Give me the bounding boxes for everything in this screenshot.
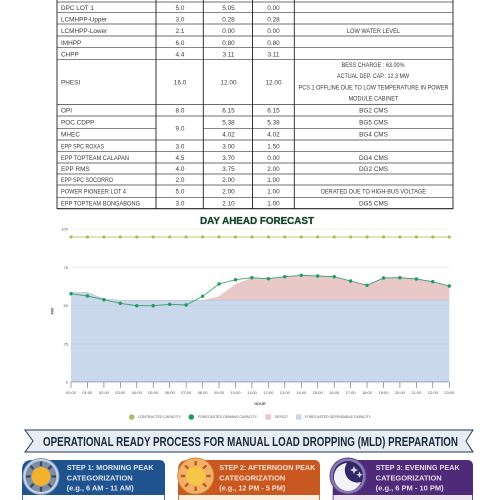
row: LCMHPP-Upper: 0.28 bbox=[222, 16, 235, 24]
card: step 2 afternoon peak: STEP 2: AFTERNOON PEAK bbox=[219, 463, 316, 472]
row: EPP TOPTEAM BONGABONG: DG5 CMS bbox=[359, 200, 388, 208]
chart: day ahead forecast area and line chart bbox=[50, 226, 455, 420]
x axis: 17:00 bbox=[346, 390, 356, 395]
row: EPP SPC SOCORRO: 2.00 bbox=[222, 177, 235, 184]
row: DPC LOT 1: DPC LOT 1 bbox=[61, 5, 94, 12]
row: MHEC: 4.02 bbox=[222, 132, 235, 138]
row: POWER PIONEER LOT 4: DERATED DUE TO HIGH-BUS VOLTAGE bbox=[321, 188, 426, 196]
x axis: 15:00 bbox=[313, 390, 323, 395]
row: OPI: 6.15 bbox=[267, 108, 280, 114]
row: LCMHPP-Lower: 0.00 bbox=[222, 28, 235, 35]
row: IMHPP: 0.80 bbox=[222, 40, 235, 47]
row: EPP TOPTEAM CALAPAN: 0.00 bbox=[267, 155, 280, 162]
x axis: 22:00 bbox=[428, 390, 439, 395]
row: POWER PIONEER LOT 4: 2.00 bbox=[222, 188, 235, 196]
row: EPP TOPTEAM BONGABONG bbox=[61, 200, 388, 208]
row: LCMHPP-Lower: 2.1 bbox=[176, 28, 185, 35]
row: EPP RMS bbox=[61, 166, 388, 173]
row: POWER PIONEER LOT 4: 5.0 bbox=[176, 188, 185, 196]
x axis: 08:00 bbox=[198, 390, 208, 395]
row: POC CDPP: 9.0 bbox=[176, 126, 185, 132]
legend bbox=[129, 414, 371, 420]
row: MHEC: 4.02 bbox=[267, 132, 280, 138]
row: CHPP: 3.11 bbox=[223, 52, 235, 58]
row: EPP SPC ROXAS bbox=[61, 144, 280, 150]
x axis bbox=[66, 382, 455, 395]
row: LCMHPP-Lower: LCMHPP-Lower bbox=[61, 28, 108, 35]
banner: operational ready process bbox=[25, 430, 473, 452]
row: EPP RMS: EPP RMS bbox=[61, 166, 90, 173]
card: step 3 evening peak bbox=[330, 458, 473, 500]
x axis: 21:00 bbox=[411, 390, 422, 395]
row: CHPP: 3.11 bbox=[268, 52, 280, 58]
icon: evening moon bbox=[330, 458, 366, 494]
row: EPP RMS: 2.00 bbox=[267, 166, 280, 173]
x axis: 20:00 bbox=[395, 390, 406, 395]
card: step 3 evening peak: (e.g., 6 PM - 10 PM) bbox=[376, 484, 444, 492]
row: EPP SPC SOCORRO bbox=[61, 177, 280, 184]
row: EPP SPC ROXAS: 3.00 bbox=[222, 144, 235, 150]
heading: day ahead forecast: DAY AHEAD FORECAST bbox=[200, 216, 314, 227]
row: EPP TOPTEAM CALAPAN bbox=[61, 155, 388, 162]
legend: FORECASTED DEPENDABLE CAPACITY bbox=[305, 414, 371, 419]
row: CHPP bbox=[61, 52, 280, 58]
area: forecasted dependable capacity bbox=[71, 292, 449, 382]
row: EPP SPC SOCORRO: EPP SPC SOCORRO bbox=[61, 177, 113, 184]
row: EPP SPC ROXAS: 1.50 bbox=[267, 144, 280, 150]
row: PHESI: 16.0 bbox=[174, 80, 187, 86]
row: EPP TOPTEAM BONGABONG: 3.0 bbox=[176, 200, 185, 208]
row: LCMHPP-Upper: 0.28 bbox=[267, 16, 280, 24]
line: contracted capacity bbox=[69, 235, 451, 239]
row: EPP TOPTEAM BONGABONG: 1.00 bbox=[267, 200, 280, 208]
card: step 3 evening peak: CATEGORIZATION bbox=[376, 474, 442, 482]
row: PHESI: BESS CHARGE : 63.00% bbox=[342, 62, 405, 69]
card: step 2 afternoon peak: (e.g., 12 PM - 5 PM) bbox=[219, 484, 286, 492]
row: PHESI: PHESI bbox=[61, 80, 80, 86]
card: step 1 morning peak: STEP 1: MORNING PEAK bbox=[67, 463, 154, 472]
x axis: 05:00 bbox=[148, 390, 159, 395]
row: LCMHPP-Upper bbox=[61, 16, 280, 24]
row: CHPP: CHPP bbox=[61, 52, 79, 58]
row: EPP RMS: DG2 CMS bbox=[359, 166, 388, 173]
x axis: 10:00 bbox=[230, 390, 241, 395]
row: EPP TOPTEAM CALAPAN: 3.70 bbox=[222, 155, 235, 162]
row: EPP TOPTEAM BONGABONG: 2.10 bbox=[222, 200, 235, 208]
row: POC CDPP bbox=[61, 120, 388, 132]
y axis labels: 50 bbox=[64, 303, 69, 308]
x axis title: HOUR bbox=[254, 402, 266, 406]
row: IMHPP: 0.80 bbox=[267, 40, 280, 47]
row: IMHPP: 6.0 bbox=[176, 40, 185, 47]
row: OPI bbox=[61, 108, 388, 114]
row: DPC LOT 1: 5.0 bbox=[176, 5, 185, 12]
row: IMHPP bbox=[61, 40, 280, 47]
card: step 1 morning peak bbox=[22, 458, 165, 500]
x axis: 13:00 bbox=[280, 390, 291, 395]
x axis: 00:00 bbox=[66, 390, 77, 395]
row: PHESI: ACTUAL DEP. CAP.: 12.3 MW bbox=[337, 73, 410, 80]
row: EPP SPC SOCORRO: 1.00 bbox=[267, 177, 280, 184]
x axis: 12:00 bbox=[263, 390, 274, 395]
row: EPP SPC ROXAS: 3.0 bbox=[176, 144, 185, 150]
x axis: 06:00 bbox=[165, 390, 175, 395]
x axis: 01:00 bbox=[82, 390, 93, 395]
icon: morning sun bbox=[23, 458, 59, 494]
x axis: 18:00 bbox=[362, 390, 373, 395]
y axis labels: 0 bbox=[66, 380, 69, 384]
row: CHPP: 4.4 bbox=[176, 52, 185, 58]
row: PHESI: 12.00 bbox=[220, 80, 237, 86]
row: LCMHPP-Upper: 3.0 bbox=[176, 16, 185, 24]
row: EPP TOPTEAM CALAPAN: DG4 CMS bbox=[359, 155, 388, 162]
row: OPI: 6.15 bbox=[222, 108, 235, 114]
row: MHEC: MHEC bbox=[61, 132, 80, 138]
y axis labels: 25 bbox=[64, 342, 69, 346]
x axis: 03:00 bbox=[115, 390, 126, 395]
row: EPP RMS: 3.75 bbox=[222, 166, 235, 173]
row: POWER PIONEER LOT 4: 1.00 bbox=[267, 188, 280, 196]
card: step 3 evening peak: STEP 3: EVENING PEAK bbox=[376, 463, 460, 472]
row: POC CDPP: 5.38 bbox=[267, 120, 280, 126]
row: DPC LOT 1 bbox=[61, 5, 280, 12]
row: PHESI: MODULE CABINET bbox=[348, 96, 399, 102]
row: DPC LOT 1: 0.00 bbox=[267, 5, 280, 12]
row: EPP TOPTEAM BONGABONG: EPP TOPTEAM BONGABONG bbox=[61, 200, 140, 208]
x axis: 07:00 bbox=[181, 390, 192, 395]
x axis: 11:00 bbox=[247, 390, 258, 395]
row: PHESI: 12.00 bbox=[266, 80, 282, 86]
card: step 1 morning peak: (e.g., 6 AM - 11 AM) bbox=[67, 484, 134, 492]
row: OPI: OPI bbox=[61, 108, 72, 114]
x axis: 04:00 bbox=[132, 390, 143, 395]
row: EPP SPC ROXAS: EPP SPC ROXAS bbox=[61, 144, 104, 150]
row: EPP RMS: 4.0 bbox=[176, 166, 185, 173]
row: PHESI: PCS 1 OFFLINE DUE TO LOW TEMPERATURE IN POWER bbox=[298, 84, 449, 92]
table: plant capacity status bbox=[57, 0, 453, 209]
y axis labels bbox=[61, 226, 69, 384]
row: EPP TOPTEAM CALAPAN: EPP TOPTEAM CALAPAN bbox=[61, 155, 129, 162]
row: IMHPP: IMHPP bbox=[61, 40, 81, 47]
x axis: 19:00 bbox=[378, 390, 389, 395]
line: forecasted demand capacity bbox=[69, 274, 451, 307]
x axis: 23:00 bbox=[444, 390, 455, 395]
x axis: 09:00 bbox=[214, 390, 225, 395]
row: POC CDPP: POC CDPP bbox=[61, 120, 94, 126]
row: POC CDPP: BG5 CMS bbox=[359, 120, 388, 126]
area: deficit bbox=[186, 275, 449, 300]
row: MHEC bbox=[61, 132, 388, 138]
row: PHESI bbox=[61, 62, 449, 102]
row: POC CDPP: 5.38 bbox=[222, 120, 235, 126]
x axis: 02:00 bbox=[99, 390, 110, 395]
legend: DEFICIT bbox=[275, 414, 288, 419]
y axis labels: 100 bbox=[61, 226, 69, 232]
row: OPI: 8.0 bbox=[176, 108, 185, 114]
y axis labels: 75 bbox=[64, 265, 69, 270]
legend: FORECASTED DEMAND CAPACITY bbox=[198, 414, 257, 419]
row: EPP SPC SOCORRO: 2.0 bbox=[176, 177, 185, 184]
row: POWER PIONEER LOT 4: POWER PIONEER LOT 4 bbox=[61, 188, 126, 196]
row: OPI: BG2 CMS bbox=[359, 108, 388, 114]
x axis: 16:00 bbox=[329, 390, 340, 395]
row: POWER PIONEER LOT 4 bbox=[61, 188, 426, 196]
card: step 2 afternoon peak bbox=[178, 458, 320, 500]
x axis: 14:00 bbox=[296, 390, 307, 395]
row: MHEC: BG4 CMS bbox=[359, 132, 388, 138]
y axis title: MW bbox=[50, 307, 54, 314]
row: LCMHPP-Lower: 0.00 bbox=[267, 28, 280, 35]
row: LCMHPP-Lower bbox=[61, 28, 400, 35]
card: step 2 afternoon peak: CATEGORIZATION bbox=[219, 474, 285, 482]
row: DPC LOT 1: 5.05 bbox=[222, 5, 235, 12]
icon: afternoon sun bbox=[178, 458, 214, 494]
row: LCMHPP-Lower: LOW WATER LEVEL bbox=[347, 28, 400, 35]
row: LCMHPP-Upper: LCMHPP-Upper bbox=[61, 16, 108, 24]
card: step 1 morning peak: CATEGORIZATION bbox=[67, 474, 133, 482]
legend: CONTRACTED CAPACITY bbox=[138, 414, 181, 419]
row: EPP TOPTEAM CALAPAN: 4.5 bbox=[176, 155, 185, 162]
